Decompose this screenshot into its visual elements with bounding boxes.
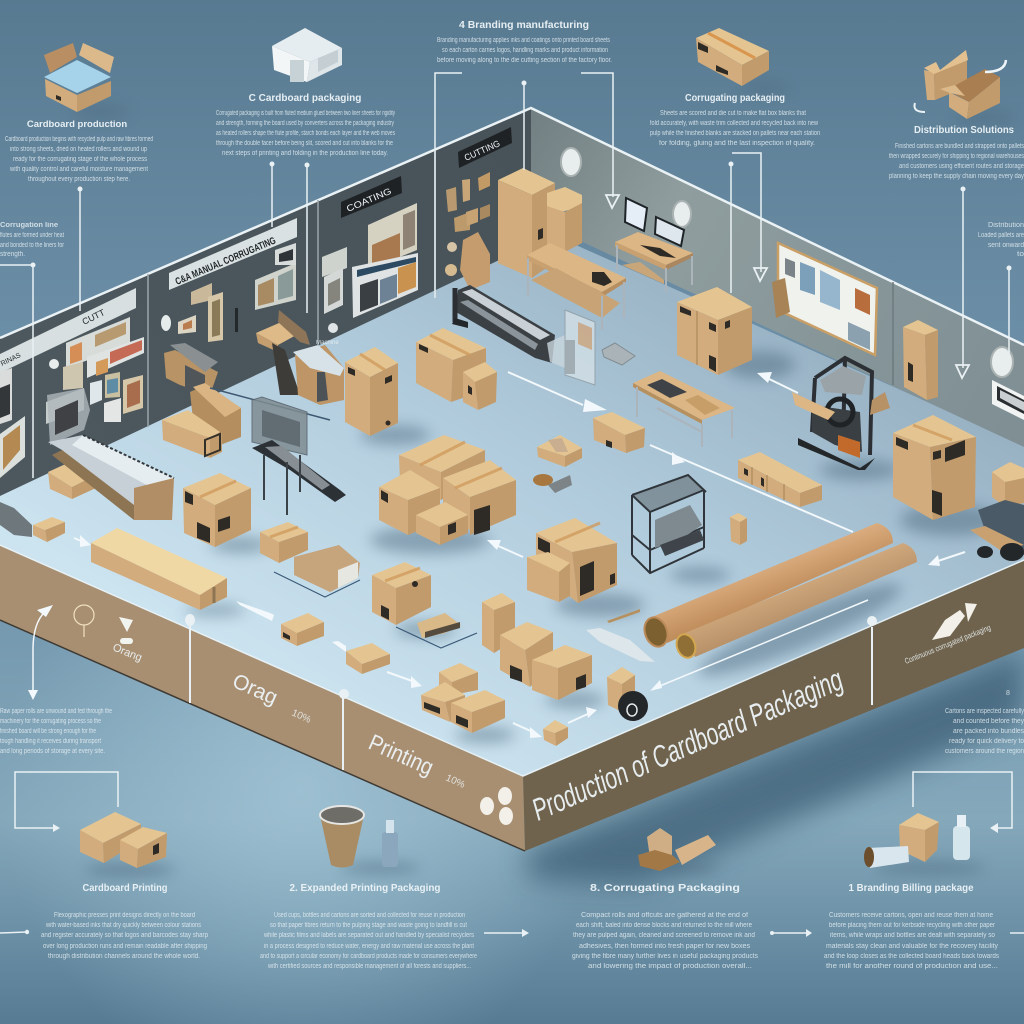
small cylinder <box>730 513 747 545</box>
text block: left edge: and bonded to the liners for <box>0 242 64 249</box>
text block: cardboard production: with quality control and careful moisture management <box>9 166 148 173</box>
text block: cardboard production: Cardboard production <box>27 119 127 130</box>
text block: bottom two: so that paper fibres return to the pulping stage and waste going to landfill is cut <box>270 922 467 929</box>
desk: back shelf <box>527 243 626 330</box>
bracket arrow: lower right <box>913 772 1012 833</box>
wall banner: cutting <box>0 288 136 373</box>
floor arrow: right tube <box>928 552 965 566</box>
text block: bottom two: while plastic films and labels are separated out and handled by specialist recyclers <box>263 932 474 939</box>
box: large with side box <box>416 328 486 402</box>
box: tall lower <box>482 593 515 653</box>
box: back crumpled <box>547 187 582 252</box>
text block: lower right: 8 <box>1006 690 1010 697</box>
box: large near front right wall <box>677 287 752 375</box>
wall top edge <box>0 108 1024 345</box>
platform icon: bulb <box>74 605 94 637</box>
floor arrow: upper flow <box>508 372 607 412</box>
text block: right edge <box>978 222 1024 258</box>
silver roll left edge <box>0 502 32 537</box>
text block: distribution: Distribution Solutions <box>914 125 1014 136</box>
platform separator pins <box>185 614 877 770</box>
bottom connector: center-left <box>484 932 512 934</box>
text block: bottom two <box>260 883 477 970</box>
arrowhead: right wall middle <box>754 268 767 281</box>
small caption: Continuous corrugated packaging <box>903 623 992 666</box>
floor shadows <box>70 83 1015 877</box>
left stack box <box>379 470 440 500</box>
arrowhead: right wall front <box>956 365 969 378</box>
icon: white package <box>272 28 342 82</box>
banner text: C&A MANUAL CORRUGATING <box>174 235 278 288</box>
text block: bottom four: the mill for another round of production and use... <box>826 963 998 970</box>
text block: bottom one: with water-based inks that dry quickly between colour stations <box>45 922 201 929</box>
main title: Production of Cardboard Packaging <box>527 662 848 827</box>
box cluster lower <box>421 663 505 733</box>
label text: CUTTING <box>463 138 502 163</box>
text block: lower left: machinery for the corrugating process so the <box>0 718 101 725</box>
floor arrow: middle flow <box>650 445 853 532</box>
text block: cardboard production: into strong sheets, dried on heated rollers and wound up <box>10 146 147 153</box>
text block: manufacturing: before moving along to the die cutting section of the factory floor. <box>437 57 612 64</box>
glass inspection unit <box>547 310 595 385</box>
text block: cardboard production: throughout every production step here. <box>28 176 130 183</box>
text block: printing packaging: Corrugating packaging <box>685 93 785 104</box>
bracket arrow: lower left <box>15 772 118 832</box>
box: small lower-left <box>281 613 324 646</box>
text block: bottom two: and to support a circular economy for cardboard products made for consumers everywhere <box>260 953 477 960</box>
scaffold machine <box>252 397 346 515</box>
box: tall narrow <box>903 320 938 400</box>
text block: bottom one: Cardboard Printing <box>82 883 168 894</box>
box: small near long box <box>260 522 308 563</box>
arrowhead: upper middle <box>606 195 619 208</box>
icon: roll and scraps <box>638 828 716 871</box>
box: small mid-low <box>346 643 390 674</box>
wall panel separators <box>148 150 893 427</box>
text block: bottom four: before placing them out for kerbside recycling with other paper <box>829 922 996 929</box>
label text: COATING <box>345 186 393 214</box>
left lower <box>421 682 465 702</box>
text block: bottom three: Compact rolls and offcuts are gathered at the end of <box>581 912 748 919</box>
foil strip <box>586 628 655 662</box>
platform: right face with title <box>523 560 1024 851</box>
row of small boxes <box>738 452 822 507</box>
clock: right wall middle <box>673 201 691 227</box>
text block: left edge: Corrugation line <box>0 222 58 229</box>
text block: printing packaging <box>650 93 820 147</box>
icon: closed shipping box <box>696 28 769 86</box>
text block: bottom three: 8. Corrugating Packaging <box>590 883 740 894</box>
cart with wheel <box>607 667 648 721</box>
text block: bottom four <box>824 883 999 970</box>
box: small left edge <box>33 517 65 542</box>
box: far right <box>992 462 1024 507</box>
floor arrow: center-left <box>487 540 523 557</box>
text block: printing packaging: pulp while the finished blanks are stacked on pallets near each station <box>650 130 820 137</box>
forklift <box>970 500 1024 561</box>
text block: left edge <box>0 222 64 258</box>
text block: lower left: finished board will be strong enough for the <box>0 728 96 735</box>
conveyor chute left <box>47 388 174 520</box>
table with layouts <box>633 371 735 447</box>
text block: bottom three: adhesives, then formed into fresh paper for new boxes <box>579 943 751 950</box>
pencil <box>607 609 640 623</box>
background glow <box>0 450 1024 1024</box>
floor arrow: cluster <box>387 672 422 688</box>
floor arrow: to long box <box>74 535 91 547</box>
box: small side <box>463 362 497 410</box>
text block: bottom four: Customers receive cartons, open and reuse them at home <box>829 912 993 919</box>
text block: corrugated packaging: Corrugated packaging is built from fluted medium glued between two liner sheets for rigidity <box>216 110 395 117</box>
wall banner: black label two <box>458 127 512 168</box>
text block: bottom three: and lowering the impact of production overall... <box>588 963 752 970</box>
text block: bottom four: 1 Branding Billing package <box>848 883 974 894</box>
small arrow: top right <box>914 103 925 112</box>
box pair lower <box>500 622 592 700</box>
text block: bottom two: 2. Expanded Printing Packaging <box>290 883 440 894</box>
floor arrow: small <box>332 641 346 652</box>
text block: distribution <box>889 125 1024 180</box>
text block: bottom one: and register accurately so that logos and barcodes stay sharp <box>41 932 208 939</box>
text block: bottom two: in a process designed to reduce water, energy and raw material use across the plant <box>264 943 474 950</box>
metal tray <box>602 343 635 365</box>
base shadow <box>525 650 1024 885</box>
text block: right edge: to <box>1017 251 1024 258</box>
text block: corrugated packaging: and strength, forming the board used by converters across the packaging industry <box>216 120 394 127</box>
tent parcel with floor frame <box>274 545 360 597</box>
floor arrow: lower right <box>513 723 542 738</box>
bottom connector: center arrow <box>512 929 529 937</box>
text block: bottom three <box>572 883 758 970</box>
icon: paper cup <box>320 806 364 868</box>
step label: printing: Printing <box>365 729 438 780</box>
text block: printing packaging: for folding, gluing and the last inspection of quality. <box>659 140 815 147</box>
text block: lower left <box>0 708 112 755</box>
box: left floor <box>183 473 251 547</box>
text block: cardboard production: Cardboard production begins with recycled pulp and raw fibres formed <box>5 136 153 143</box>
top stack box <box>399 435 485 472</box>
glass frame machine <box>632 475 706 573</box>
small cube <box>543 720 568 746</box>
tan feeder machine left <box>162 343 330 458</box>
wall posters: left panel <box>0 317 144 478</box>
platform icon: right logo <box>932 603 977 640</box>
text block: cardboard production: ready for the corrugating stage of the whole process <box>13 156 147 163</box>
front small box <box>527 552 570 572</box>
cardboard tube two <box>673 543 917 660</box>
dark printing machine <box>792 358 890 470</box>
corkboard poster <box>772 243 877 355</box>
desk: computer station <box>615 198 693 292</box>
cardboard tube one <box>641 523 893 650</box>
flat parcel with floor frame <box>396 613 477 648</box>
box pair center right <box>527 518 617 603</box>
wall hanging samples <box>445 172 490 290</box>
right wall <box>531 108 1024 447</box>
text block: right edge: Distribution <box>988 222 1024 229</box>
connector lines with dots: top <box>0 73 1012 478</box>
text block: bottom four: items, while wraps and bottles are dealt with separately so <box>830 932 995 939</box>
icon: box, roll and bottle <box>864 813 970 868</box>
box: big right <box>893 415 976 520</box>
text block: cardboard production <box>5 119 153 183</box>
bottom connector: center-right <box>770 929 812 937</box>
text block: bottom three: they are pulped again, cleaned and screened to remove ink and <box>573 932 755 939</box>
floor <box>0 225 1024 776</box>
monitor two <box>655 217 684 246</box>
text block: bottom three: each shift, baled into dense blocks and returned to the mill where <box>576 922 752 929</box>
lower box <box>162 410 220 438</box>
text block: printing packaging: fold accurately, with waste trim collected and recycled back into new <box>650 120 819 127</box>
platform icon: triangle and bar <box>119 617 133 644</box>
text block: bottom three: giving the fibre many further lives in useful packaging products <box>572 953 758 960</box>
left curved arrow on platform <box>28 605 53 700</box>
icon: open box with blue liner <box>44 43 114 112</box>
clock: right wall back <box>561 148 581 176</box>
long box <box>91 528 227 610</box>
text block: lower left: and long periods of storage at every site. <box>0 748 105 755</box>
monitor one <box>625 198 647 231</box>
text block: left edge: flutes are formed under heat <box>0 232 64 239</box>
right lower <box>451 690 505 712</box>
text block: bottom two: with certified sources and responsible management of all forests and suppliers... <box>267 963 471 970</box>
left wall <box>0 108 531 496</box>
wall posters: right panel: Machine <box>316 340 339 346</box>
text block: manufacturing: so each carton carries logos, handling marks and product information <box>442 47 608 54</box>
printer roller machine <box>452 285 555 363</box>
bottom connector: right <box>1010 932 1024 934</box>
text block: printing packaging: Sheets are scored and die cut to make flat box blanks that <box>660 110 806 117</box>
wall posters: right panel <box>316 203 418 346</box>
central box cluster <box>379 435 516 545</box>
platform: left face with step labels <box>0 545 525 851</box>
text block: bottom one: over long production runs and remain readable after shipping <box>43 943 207 950</box>
text block: bottom two: Used cups, bottles and cartons are sorted and collected for reuse in production <box>274 912 465 919</box>
floor arrow: long return <box>650 600 868 691</box>
text block: corrugated packaging: C Cardboard packaging <box>249 93 361 104</box>
text block: manufacturing: Branding manufacturing applies inks and coatings onto printed board sheets <box>437 37 610 44</box>
wall framed sign <box>992 380 1024 420</box>
banner text left: RINAS <box>0 352 22 368</box>
text block: bottom one: Flexographic presses print designs directly on the board <box>54 912 195 919</box>
tan feeder machine right <box>256 310 344 405</box>
front stack box <box>416 502 468 527</box>
text block: manufacturing <box>437 20 612 64</box>
text block: corrugated packaging <box>216 93 395 157</box>
small mark: 10% <box>444 773 467 791</box>
text block: lower left: tough handling it receives during transport <box>0 738 101 745</box>
clock: right wall front <box>991 347 1013 377</box>
text block: manufacturing: 4 Branding manufacturing <box>459 20 589 31</box>
text block: bottom four: materials stay clean and valuable for the recovery facility <box>826 943 998 950</box>
stacked top <box>439 663 478 682</box>
banner text: CUTT <box>80 307 107 327</box>
text block: bottom one <box>41 883 208 960</box>
text block: bottom four: and the loop closes as the collected board heads back towards <box>824 953 999 960</box>
box: tall back corner <box>498 168 555 278</box>
floor arrow: from table to machine <box>757 372 798 393</box>
right stack box <box>443 460 516 497</box>
small mark: 10% <box>290 708 313 726</box>
text block: corrugated packaging: through the double facer before being slit, scored and cut into blanks for the <box>216 140 393 147</box>
icon: water bottle <box>382 820 398 867</box>
wall posters: middle panel <box>161 243 296 342</box>
text block: corrugated packaging: next steps of printing and folding in the production line today. <box>222 150 388 157</box>
text block: corrugated packaging: as heated rollers shape the flute profile, starch bonds each layer and the web moves <box>216 130 395 137</box>
box: tall front of wall <box>345 347 398 436</box>
text block: lower left: Raw paper rolls are unwound and fed through the <box>0 708 112 715</box>
text block: bottom one: through distribution channels around the whole world. <box>48 953 200 960</box>
wall banner: corrugating <box>169 218 297 290</box>
icon: open cartons <box>924 50 1006 119</box>
platform edge highlights <box>0 545 1024 776</box>
step label: orang: Orag <box>229 670 281 710</box>
bottom connector: left <box>0 930 29 934</box>
text block: lower right <box>945 690 1024 755</box>
wall banner: black label one <box>341 176 402 218</box>
step label: cargo: Orang <box>111 642 144 664</box>
small debris <box>533 474 572 493</box>
text block: left edge: strength. <box>0 251 25 258</box>
icon: two boxes <box>80 812 167 868</box>
platform icon: recycle <box>480 787 513 825</box>
floor arrow: cube to cart <box>568 707 597 723</box>
floor arrow: after long box <box>236 601 274 621</box>
wrapped parcel <box>537 435 582 467</box>
box: row near table <box>593 412 645 453</box>
box: center floor <box>372 562 431 625</box>
